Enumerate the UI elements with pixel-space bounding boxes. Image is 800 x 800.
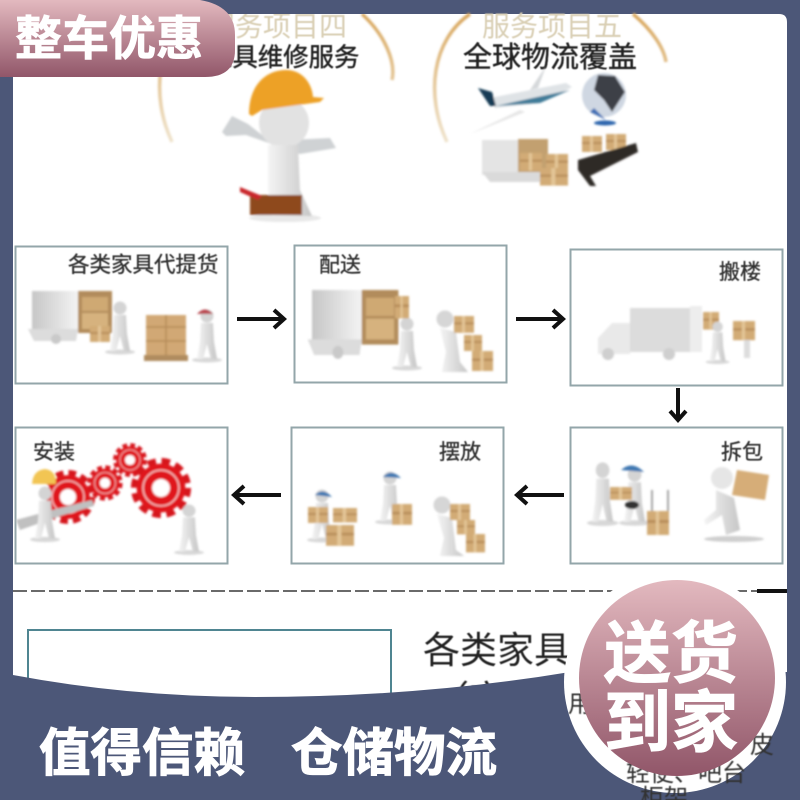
placing illustration <box>307 472 485 556</box>
icon: worker with helmet and toolbox <box>222 70 336 222</box>
badge: home delivery <box>579 580 775 776</box>
installation label: 安装 <box>33 441 75 464</box>
upstairs illustration <box>598 306 755 364</box>
service item four: repair <box>160 11 393 222</box>
badge line one: 送货 <box>604 617 738 692</box>
service heading tan: 服务项目四 <box>207 11 347 42</box>
badge white ring with clipped text <box>564 571 786 800</box>
ring text: right fragment: 皮 <box>750 732 774 759</box>
bottom wave band <box>0 672 800 800</box>
panel: carrying upstairs <box>570 250 782 386</box>
arrow: stairs to unpacking <box>670 388 686 420</box>
upstairs label: 搬楼 <box>719 261 761 284</box>
service heading dark: 家具维修服务 <box>207 44 359 72</box>
pickup label: 各类家具代提货 <box>68 253 219 277</box>
thick divider segment <box>757 589 787 593</box>
panel: lower empty box <box>28 630 391 750</box>
tab title: 整车优惠 <box>15 12 203 65</box>
service item five: global logistics <box>435 11 666 186</box>
ring text: lower line: 轻便、吧台 <box>626 760 746 787</box>
gold arc <box>435 14 666 142</box>
arrow: delivery to stairs <box>516 310 563 328</box>
pickup illustration <box>28 291 222 362</box>
panel: delivery <box>294 246 506 382</box>
icon: airplane <box>470 66 572 134</box>
panel: furniture pickup <box>16 246 228 384</box>
unpacking illustration <box>587 462 769 542</box>
ring text: left fragment: 用 <box>568 691 592 718</box>
arrow: unpacking to placing <box>517 486 564 504</box>
panel: placing <box>292 428 504 564</box>
text: second line peek: （京 <box>432 679 506 720</box>
service heading tan: 服务项目五 <box>482 11 622 42</box>
bottom slogan <box>39 724 497 782</box>
service heading dark: 全球物流覆盖 <box>463 41 637 74</box>
installation illustration: gears and workers <box>16 446 204 555</box>
corner tab: full truck offer <box>0 0 235 77</box>
icon: truck with boxes <box>482 139 568 186</box>
arrow: placing to installation <box>234 486 281 504</box>
slogan part two: 仓储物流 <box>291 724 497 782</box>
divider dashes <box>13 590 757 592</box>
delivery label: 配送 <box>319 254 361 277</box>
delivery illustration <box>308 290 493 372</box>
icon: globe <box>582 73 626 126</box>
panel: unpacking <box>570 428 782 564</box>
arrow: pickup to delivery <box>237 310 284 328</box>
gold arc <box>160 14 393 142</box>
heading: furniture service: 各类家具专 <box>423 630 608 671</box>
panel: installation <box>16 428 228 564</box>
slogan part one: 值得信赖 <box>39 724 245 782</box>
placing label: 摆放 <box>439 441 481 464</box>
icon: conveyor with cartons <box>578 134 638 186</box>
badge line two: 到家 <box>604 686 738 761</box>
unpacking label: 拆包 <box>721 441 763 464</box>
